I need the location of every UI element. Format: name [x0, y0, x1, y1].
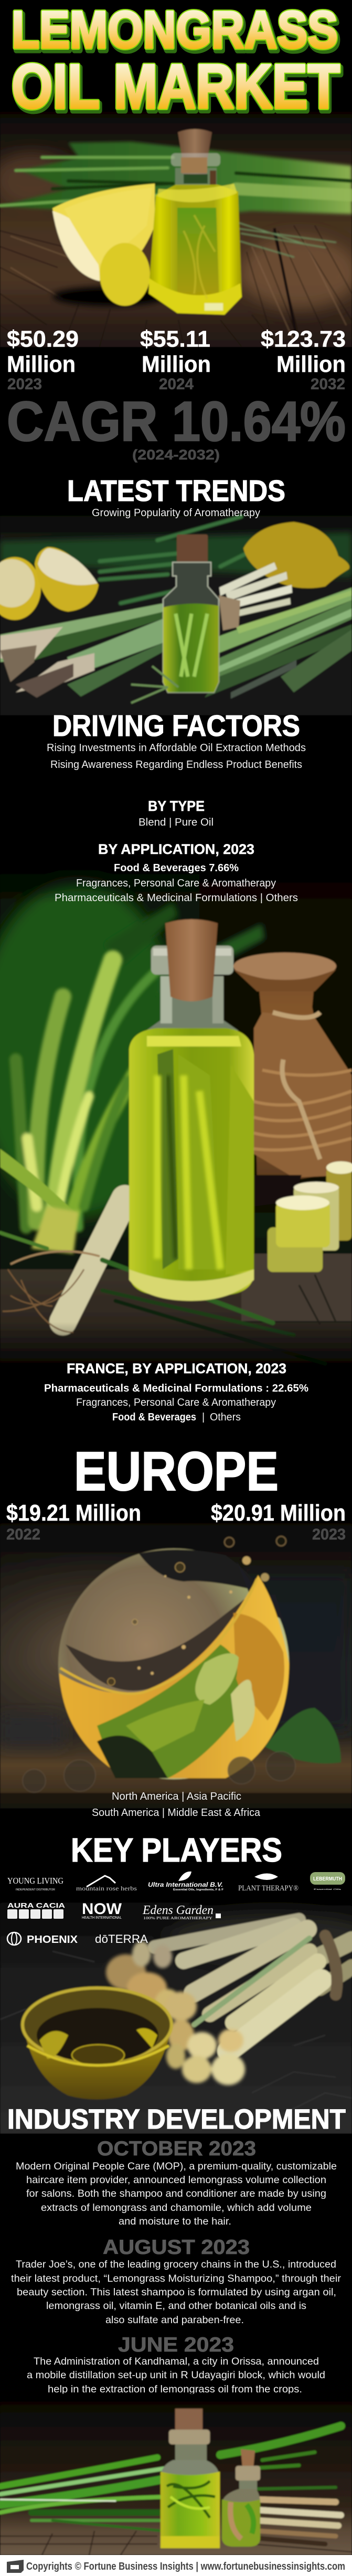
photo: glass oil sphere: [0, 1519, 352, 1809]
development: August 2023: their latest product, “Lemongrass Moisturizing Shampoo,” through their: [11, 2273, 342, 2284]
stat: 2032 market value: [261, 326, 346, 393]
stat: 2032 market value: $123.73: [261, 326, 346, 352]
heading: Europe with values: 2023: [312, 1526, 346, 1543]
green leaf: [265, 1708, 341, 1763]
stat: 2024 market value: 2024: [159, 376, 194, 393]
stat: 2024 market value: $55.11: [140, 326, 210, 352]
bottle cork: [165, 919, 218, 1001]
development: June 2023: a mobile distillation set-up unit in R Udayagiri block, which would: [27, 2369, 325, 2381]
stat: 2024 market value: [140, 326, 211, 393]
small bottle: [222, 2449, 260, 2547]
icon: whole lemon: [243, 522, 349, 588]
stat: 2032 market value: 2032: [311, 376, 345, 393]
table: [0, 1268, 352, 1366]
segment: France by application: |: [202, 1412, 205, 1423]
heading: Europe with values: $19.21 Million: [6, 1500, 141, 1526]
segment: by application: BY APPLICATION, 2023: [98, 841, 254, 857]
development: October 2023: Modern Original People Care (MOP), a premium-quality, customizable: [16, 2161, 337, 2172]
glass oil bowl: [23, 1988, 172, 2099]
lemongrass blades: [0, 2426, 341, 2531]
development: August 2023: beauty section. This latest shampoo is formulated by using argan oil,: [17, 2286, 336, 2298]
logo: Young Living: INDEPENDENT DISTRIBUTOR: [16, 1888, 55, 1891]
lemongrass stalks left: [0, 603, 164, 698]
development: June 2023: [27, 2334, 325, 2395]
heading: driving factors: [47, 709, 306, 771]
clay jug: [233, 953, 352, 1206]
logo: Edens Garden: Edens Garden: [142, 1904, 214, 1917]
logo: Ultra International: [148, 1872, 223, 1891]
logo: Young Living: YOUNG LIVING: [7, 1876, 63, 1886]
CAGR headline: (2024-2032): [132, 447, 220, 463]
regions: South America | Middle East & Africa: [92, 1807, 261, 1819]
development: October 2023: and moisture to the hair.: [119, 2216, 231, 2227]
segment: France by application: Others: [210, 1412, 241, 1423]
stat: 2023 market value: $50.29: [7, 326, 79, 352]
logo: Edens Garden: 100% PURE AROMATHERAPY: [143, 1916, 212, 1920]
long green leaves on table: [0, 1233, 325, 1364]
logo: Ultra International: Ultra International B.V.: [148, 1881, 223, 1888]
heading: Europe with values: [6, 1441, 346, 1543]
stat: 2032 market value: Million: [276, 351, 346, 377]
green leaves inside: [60, 1579, 257, 1778]
heading: driving factors: Rising Awareness Regarding Endless Product Benefits: [50, 759, 302, 771]
logo: NOW Health International: NOW: [82, 1900, 122, 1918]
icon: lemon slice: [100, 243, 150, 306]
footer bar: [0, 2555, 352, 2576]
development: August 2023: also sulfate and paraben-free.: [105, 2314, 244, 2326]
logo: Young Living: [7, 1876, 63, 1891]
logo: Mountain Rose Herbs: mountain rose herbs: [76, 1885, 137, 1892]
logo: Plant Therapy: [238, 1874, 298, 1893]
dark top of sphere: [139, 1549, 262, 1592]
logo: Aura Cacia: AURA CACIA: [7, 1901, 66, 1909]
sphere glass: [58, 1548, 289, 1779]
regions: North America | Asia Pacific: [112, 1791, 241, 1802]
heading: driving factors: DRIVING FACTORS: [52, 709, 300, 743]
logo: Lebermuth: [310, 1872, 345, 1890]
lower dark interior: [66, 1589, 257, 1691]
icon: lemon half left: [0, 557, 41, 620]
heading: latest trends: LATEST TRENDS: [67, 474, 285, 508]
development: October 2023: [16, 2137, 337, 2227]
segment: by application: [55, 841, 298, 904]
photo: bottle with lemongrass stalks and lemons: [0, 506, 352, 715]
segment: by type: BY TYPE: [148, 798, 205, 814]
bottle body with oil: [129, 1028, 254, 1301]
cut lemongrass pieces: [268, 1161, 352, 1272]
segment: France by application: Pharmaceuticals & Medicinal Formulations : 22.65%: [44, 1383, 308, 1394]
dry lemongrass bundle: [252, 2499, 341, 2544]
bottle body: [148, 184, 242, 315]
icon: lemon wedge: [52, 184, 155, 281]
photo: bottle with lemon and grass: [0, 99, 352, 347]
development: August 2023: Trader Joe’s, one of the leading grocery chains in the U.S., introduced: [16, 2259, 336, 2270]
heading: latest trends: Growing Popularity of Aromatherapy: [92, 507, 260, 519]
regions: [92, 1791, 261, 1819]
segment: by type: Blend | Pure Oil: [138, 817, 214, 828]
lemongrass stalks right: [205, 562, 352, 699]
segment: France by application: Food & Beverages: [112, 1412, 196, 1423]
stat: 2023 market value: 2023: [7, 376, 42, 393]
development: August 2023: lemongrass oil, vitamin E, and other botanical oils and is: [46, 2300, 306, 2312]
development: October 2023: for salons. Both the shampoo and conditioner are made by using: [26, 2188, 326, 2199]
heading: driving factors: Rising Investments in Affordable Oil Extraction Methods: [47, 742, 306, 754]
heading: key players: KEY PLAYERS: [71, 1831, 282, 1869]
bottle glass neck: [146, 946, 239, 1031]
segment: France by application: Fragrances, Personal Care & Aromatherapy: [76, 1397, 276, 1408]
logo: Lebermuth: Essential Oils: [314, 1888, 341, 1890]
logo: Mountain Rose Herbs: [76, 1876, 137, 1892]
development: June 2023: The Administration of Kandhamal, a city in Orissa, announced: [34, 2356, 319, 2367]
development: October 2023: extracts of lemongrass and chamomile, which add volume: [41, 2202, 312, 2214]
segment: France by application: FRANCE, BY APPLICATION, 2023: [67, 1361, 286, 1376]
heading: latest trends: [67, 474, 285, 519]
title: [12, 1, 342, 124]
bottle oil: [131, 604, 219, 703]
segment: France by application: [44, 1361, 308, 1423]
segment: by type: [138, 798, 214, 828]
bottle cork: [176, 533, 209, 562]
logo: Plant Therapy: PLANT THERAPY®: [238, 1884, 298, 1893]
development: June 2023: help in the extraction of lemongrass oil from the crops.: [48, 2383, 302, 2395]
heading: Europe with values: EUROPE: [74, 1441, 279, 1502]
oil droplets: [108, 1536, 286, 1685]
icon: Fortune Business Insights logo: [7, 2560, 24, 2573]
development: August 2023: [11, 2236, 342, 2326]
bottle glass: [163, 562, 219, 692]
logo: Phoenix: [7, 1932, 78, 1946]
photo: lemongrass bundle with oil bowl: [0, 1901, 352, 2134]
bottle glass neck: [171, 153, 220, 191]
lemongrass blades: [16, 960, 157, 1233]
lemongrass bundle: [106, 1920, 352, 2085]
logo: Phoenix: PHOENIX: [27, 1934, 78, 1946]
logo: NOW Health International: HEALTH INTERNATIONAL: [82, 1916, 122, 1920]
stat: 2023 market value: [7, 326, 79, 393]
photo: bottle with fresh lemongrass and clay jug: [0, 846, 352, 1381]
development: August 2023: AUGUST 2023: [103, 2236, 250, 2259]
large bottle: [161, 2409, 220, 2548]
stat: 2023 market value: Million: [7, 351, 76, 377]
development: October 2023: haircare item provider, announced lemongrass volume collection: [26, 2174, 326, 2186]
logo: Aura Cacia: [7, 1901, 66, 1919]
stat: 2024 market value: Million: [142, 351, 211, 377]
small glass beads: [23, 1751, 295, 1792]
development: June 2023: JUNE 2023: [118, 2334, 234, 2356]
bottle cork: [178, 129, 212, 174]
logo: Lebermuth: LEBERMUTH: [313, 1876, 342, 1882]
icon: lemon half right: [35, 547, 99, 612]
logo: doTERRA: dōTERRA: [95, 1932, 148, 1946]
lemongrass root stalk: [3, 1199, 125, 1332]
logo: Ultra International: Essential Oils, Ingredients, F & F: [173, 1888, 223, 1891]
segment: by application: Fragrances, Personal Care & Aromatherapy: [76, 878, 276, 889]
heading: Europe with values: 2022: [6, 1526, 40, 1543]
segment: by application: Pharmaceuticals & Medicinal Formulations | Others: [55, 892, 298, 904]
development: October 2023: OCTOBER 2023: [97, 2137, 256, 2160]
photo: two bottles with lemongrass: [0, 2393, 352, 2555]
oil lower half: [59, 1575, 289, 1778]
segment: by application: Food & Beverages 7.66%: [114, 862, 239, 874]
